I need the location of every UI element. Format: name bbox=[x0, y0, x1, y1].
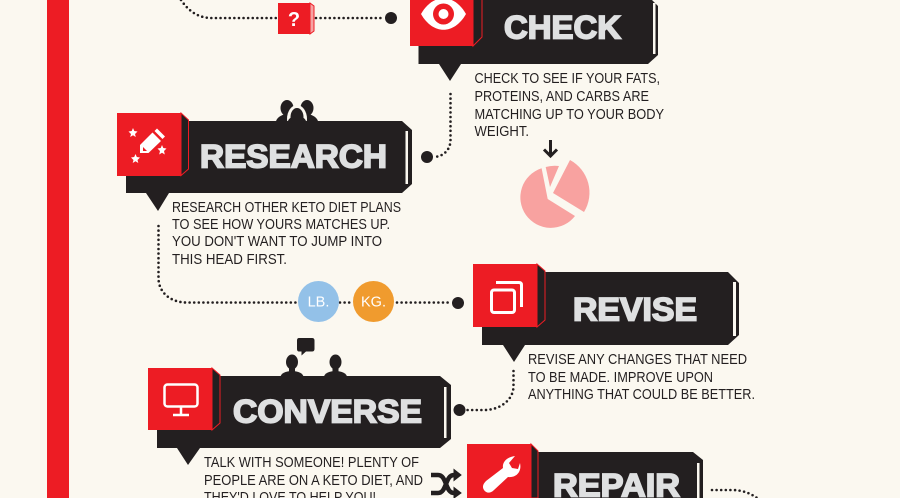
connector: repair onward bbox=[712, 490, 757, 498]
text block: revise: TO BE MADE. IMPROVE UPON bbox=[528, 369, 713, 386]
panel: research bbox=[117, 113, 412, 211]
icon: computer monitor bbox=[164, 384, 198, 415]
text block: check: PROTEINS, AND CARBS ARE bbox=[474, 88, 649, 105]
text block: research bbox=[172, 199, 401, 268]
connector: question mark to check bbox=[181, 0, 397, 24]
icon: pound badge: LB. bbox=[308, 294, 329, 310]
text block: converse: PEOPLE ARE ON A KETO DIET, AND bbox=[204, 472, 423, 489]
arrow: down to pie chart bbox=[544, 140, 557, 156]
text block: research: YOU DON'T WANT TO JUMP INTO bbox=[172, 233, 382, 250]
icon: question mark box bbox=[278, 3, 314, 34]
connector: research to revise bbox=[158, 226, 464, 309]
text block: check: WEIGHT. bbox=[474, 123, 529, 140]
panel: converse bbox=[148, 368, 451, 465]
text block: converse bbox=[204, 454, 423, 498]
text block: revise: ANYTHING THAT COULD BE BETTER. bbox=[528, 386, 755, 403]
icon: people group above research bbox=[276, 100, 318, 133]
heading: research: RESEARCH bbox=[200, 138, 387, 174]
text block: check: CHECK TO SEE IF YOUR FATS, bbox=[474, 70, 660, 87]
text block: check: MATCHING UP TO YOUR BODY bbox=[474, 106, 664, 123]
text block: converse: TALK WITH SOMEONE! PLENTY OF bbox=[204, 454, 419, 471]
connector: revise to converse bbox=[454, 371, 514, 416]
heading: converse: CONVERSE bbox=[233, 393, 422, 429]
heading: check: CHECK bbox=[504, 9, 621, 45]
icon: kilogram badge bbox=[353, 281, 394, 322]
panel: revise bbox=[473, 264, 739, 362]
text block: research: RESEARCH OTHER KETO DIET PLANS bbox=[172, 199, 401, 216]
text block: check bbox=[474, 70, 664, 140]
text block: research: TO SEE HOW YOURS MATCHES UP. bbox=[172, 216, 390, 233]
connector: check to research bbox=[421, 94, 450, 163]
red vertical timeline bar bbox=[47, 0, 69, 498]
icon: eye bbox=[421, 0, 466, 30]
pie chart bbox=[520, 160, 589, 228]
icon: pound badge bbox=[298, 281, 339, 322]
icon: speech bubble bbox=[297, 338, 314, 356]
icon: question mark box: ? bbox=[288, 9, 300, 31]
text block: revise: REVISE ANY CHANGES THAT NEED bbox=[528, 351, 747, 368]
icon: two people talking bbox=[280, 338, 347, 383]
panel: repair bbox=[467, 444, 703, 498]
text block: research: THIS HEAD FIRST. bbox=[172, 251, 287, 268]
icon: shuffle arrows bbox=[431, 470, 461, 498]
heading: revise: REVISE bbox=[573, 291, 697, 327]
icon: overlapping squares bbox=[492, 282, 522, 312]
text block: revise bbox=[528, 351, 755, 403]
icon: wrench bbox=[483, 456, 520, 493]
icon: pencil and stars bbox=[128, 128, 166, 163]
panel: check bbox=[410, 0, 658, 81]
icon: kilogram badge: KG. bbox=[361, 294, 386, 310]
